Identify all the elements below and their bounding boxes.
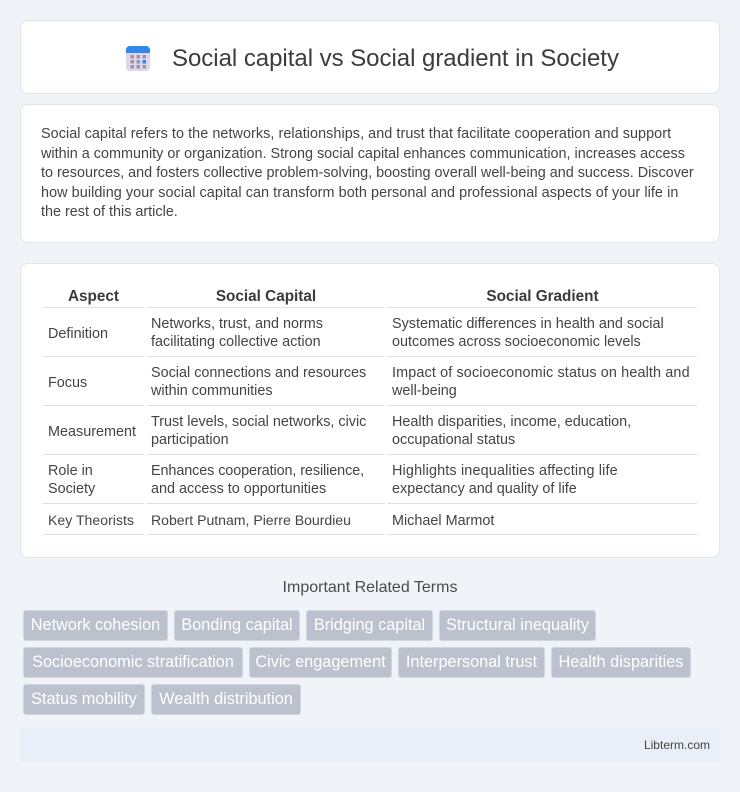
heading: important related terms: Important Related Terms (283, 579, 457, 596)
tag (23, 647, 243, 678)
text: introduction paragraph: Social capital refers to the networks, relationships, and trust that facilitate cooperation and support (41, 126, 671, 142)
row: key theorists: Key Theorists (48, 512, 134, 528)
tag (23, 684, 145, 715)
tag: Socioeconomic stratification (32, 653, 234, 671)
text: introduction paragraph: to resources, and fosters collective problem-solving, boosting overall well-being and success. Discover (41, 165, 694, 181)
tag (439, 610, 596, 641)
row: focus (48, 365, 690, 399)
row: role in society: Enhances cooperation, resilience, (151, 463, 364, 479)
text: introduction paragraph: within a community or organization. Strong social capital enhances communication, increases access (41, 146, 685, 162)
text: introduction paragraph (41, 126, 694, 220)
row: focus: Social connections and resources (151, 365, 366, 381)
row: definition: Definition (48, 326, 108, 342)
row: focus: well-being (392, 383, 457, 399)
tag cloud: related terms (23, 610, 691, 715)
table header: Social Gradient (486, 288, 599, 305)
text: introduction paragraph: how building your social capital can transform both personal and professional aspects of your life in (41, 185, 678, 201)
tag: Status mobility (31, 690, 137, 708)
tag: Wealth distribution (159, 690, 293, 708)
tag (249, 647, 392, 678)
panel: header (20, 20, 720, 94)
row: role in society: Role in (48, 463, 93, 479)
footer credit: Libterm.com (644, 738, 710, 752)
row: measurement: Measurement (48, 424, 136, 440)
row: role in society (48, 463, 618, 497)
row: measurement: occupational status (392, 432, 515, 448)
icon: calendar (126, 46, 150, 71)
row: key theorists: Michael Marmot (392, 513, 494, 529)
tag: Structural inequality (446, 616, 589, 634)
row: focus: within communities (151, 383, 273, 399)
tag: Network cohesion (31, 616, 160, 634)
tag (551, 647, 691, 678)
tag (398, 647, 545, 678)
row: measurement: Health disparities, income, education, (392, 414, 631, 430)
text: introduction paragraph: the rest of this article. (41, 204, 178, 220)
table header: Social Capital (216, 288, 316, 305)
row: definition: Systematic differences in health and social (392, 316, 664, 332)
table header (68, 288, 599, 305)
tag (151, 684, 301, 715)
row: definition: facilitating collective action (151, 334, 321, 350)
row: definition: outcomes across socioeconomic levels (392, 334, 641, 350)
tag: Bridging capital (314, 616, 425, 634)
row: measurement: participation (151, 432, 229, 448)
panel: comparison table (20, 263, 720, 558)
tag (174, 610, 300, 641)
row: role in society: Society (48, 481, 95, 497)
panel: introduction (20, 104, 720, 243)
row: focus: Impact of socioeconomic status on health and (392, 365, 690, 381)
row: key theorists: Robert Putnam, Pierre Bourdieu (151, 512, 351, 528)
row: role in society: Highlights inequalities affecting life (392, 463, 618, 479)
tag (23, 610, 168, 641)
title: Social capital vs Social gradient in Society (172, 45, 619, 72)
tag (306, 610, 433, 641)
row: focus: Focus (48, 375, 87, 391)
footer (20, 728, 720, 762)
row: definition: Networks, trust, and norms (151, 316, 323, 332)
row: key theorists (48, 512, 494, 529)
tag: Health disparities (559, 653, 683, 671)
tag: Civic engagement (255, 653, 386, 671)
row: measurement: Trust levels, social networks, civic (151, 414, 366, 430)
row: role in society: expectancy and quality of life (392, 481, 577, 497)
row: measurement (48, 414, 631, 448)
table header: Aspect (68, 288, 119, 305)
tag: Bonding capital (181, 616, 293, 634)
tag: Interpersonal trust (406, 653, 537, 671)
row: role in society: and access to opportunities (151, 481, 326, 497)
row: definition (48, 316, 664, 350)
